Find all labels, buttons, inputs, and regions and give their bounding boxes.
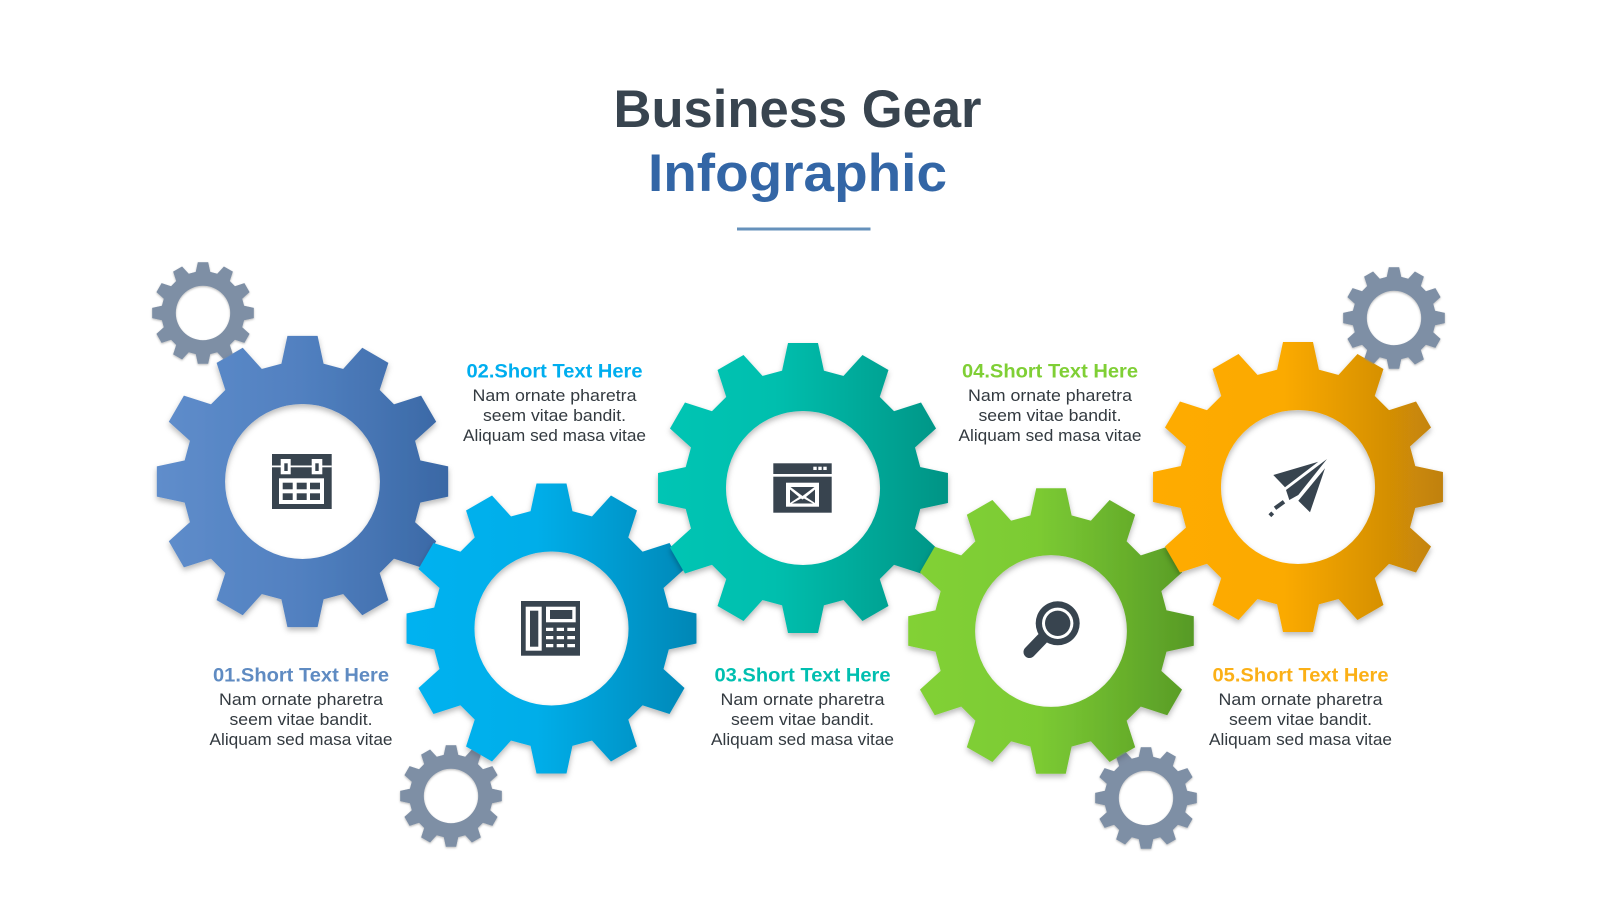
gear 1: blue <box>157 336 448 627</box>
icon: calendar <box>272 454 332 509</box>
text block 05: 05.Short Text Here <box>1212 666 1388 686</box>
gear 5: orange <box>1153 342 1443 632</box>
text block 05 <box>1209 666 1392 749</box>
title <box>614 80 982 203</box>
small gear: top right <box>1343 267 1445 369</box>
text block 04: 04.Short Text Here <box>962 362 1138 382</box>
text block 04: seem vitae bandit. <box>978 406 1122 425</box>
text block 01: seem vitae bandit. <box>230 710 372 729</box>
title: Business Gear <box>614 80 982 139</box>
text block 01: Aliquam sed masa vitae <box>210 730 392 749</box>
text block 03: Aliquam sed masa vitae <box>711 730 894 749</box>
text block 03: Nam ornate pharetra <box>720 690 885 709</box>
icon: paper plane <box>1268 459 1327 517</box>
text block 05: Nam ornate pharetra <box>1218 690 1383 709</box>
title: Infographic <box>648 144 947 203</box>
text block 03 <box>711 666 894 749</box>
text block 02: Aliquam sed masa vitae <box>463 426 646 445</box>
text block 02: Nam ornate pharetra <box>472 386 637 405</box>
text block 02: seem vitae bandit. <box>483 406 626 425</box>
text block 03: seem vitae bandit. <box>731 710 874 729</box>
text block 02 <box>463 362 646 445</box>
icon: magnifier <box>1030 601 1080 652</box>
icon: browser mail window <box>773 463 832 513</box>
text block 04 <box>958 362 1142 445</box>
text block 03: 03.Short Text Here <box>714 666 890 686</box>
small gear: bottom fourth <box>1095 747 1197 849</box>
text block 05: seem vitae bandit. <box>1229 710 1372 729</box>
small gear: top left <box>152 262 254 364</box>
text block 04: Nam ornate pharetra <box>968 386 1133 405</box>
small gear: bottom second <box>400 745 502 847</box>
text block 01 <box>210 666 392 749</box>
gear 3: teal <box>658 343 948 633</box>
text block 02: 02.Short Text Here <box>466 362 642 382</box>
text block 01: 01.Short Text Here <box>213 666 389 686</box>
text block 01: Nam ornate pharetra <box>219 690 384 709</box>
text block 05: Aliquam sed masa vitae <box>1209 730 1392 749</box>
gear 4: green <box>909 489 1193 773</box>
text block 04: Aliquam sed masa vitae <box>958 426 1142 445</box>
gear 2: cyan <box>407 484 696 773</box>
icon: desk phone <box>521 601 580 656</box>
